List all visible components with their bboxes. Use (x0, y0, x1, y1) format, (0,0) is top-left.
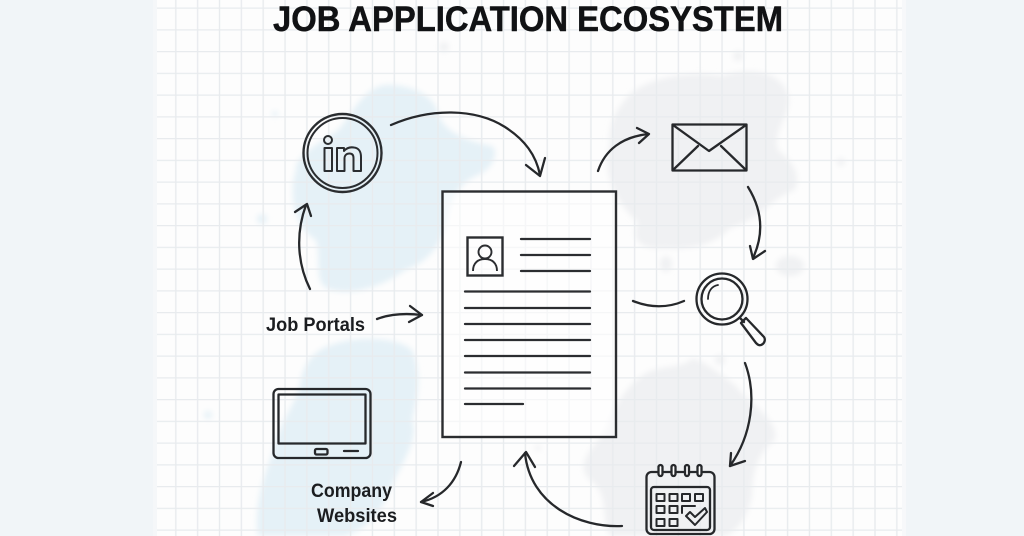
icon: magnifying glass (696, 274, 765, 345)
arrow: envelope to magnifier (748, 187, 765, 259)
icon: tablet (274, 389, 370, 458)
arrow: Job Portals to LinkedIn (295, 204, 311, 289)
resume document (442, 192, 616, 437)
watercolor blob: bottom left blue (204, 339, 418, 536)
icon: LinkedIn (304, 114, 382, 192)
arrow: Job Portals to resume (377, 306, 422, 322)
arrow: resume to envelope (598, 128, 649, 171)
label: Job Portals: Job Portals (266, 315, 365, 336)
arrow stroke: magnifier to resume (633, 301, 684, 306)
arrow: calendar to resume (514, 452, 622, 526)
watercolor blob: top right gray (439, 42, 845, 276)
watercolor blob: bottom right gray (535, 355, 776, 536)
grid lines (157, 0, 902, 536)
watercolor blob: top left blue (257, 85, 495, 292)
resume text lines (465, 239, 590, 404)
label: Company Websites: Company (311, 481, 392, 502)
arrow: magnifier to calendar (730, 363, 751, 466)
label: Company Websites: Websites (317, 506, 397, 527)
label: Company Websites (311, 481, 397, 527)
icon: calendar (646, 465, 714, 534)
panel: grid paper (153, 0, 906, 536)
arrow: resume to Company Websites (421, 462, 461, 506)
arrow: LinkedIn to resume (391, 112, 545, 176)
photo frame with person icon (468, 238, 502, 276)
title: JOB APPLICATION ECOSYSTEM (273, 0, 783, 39)
icon: envelope (672, 124, 746, 170)
